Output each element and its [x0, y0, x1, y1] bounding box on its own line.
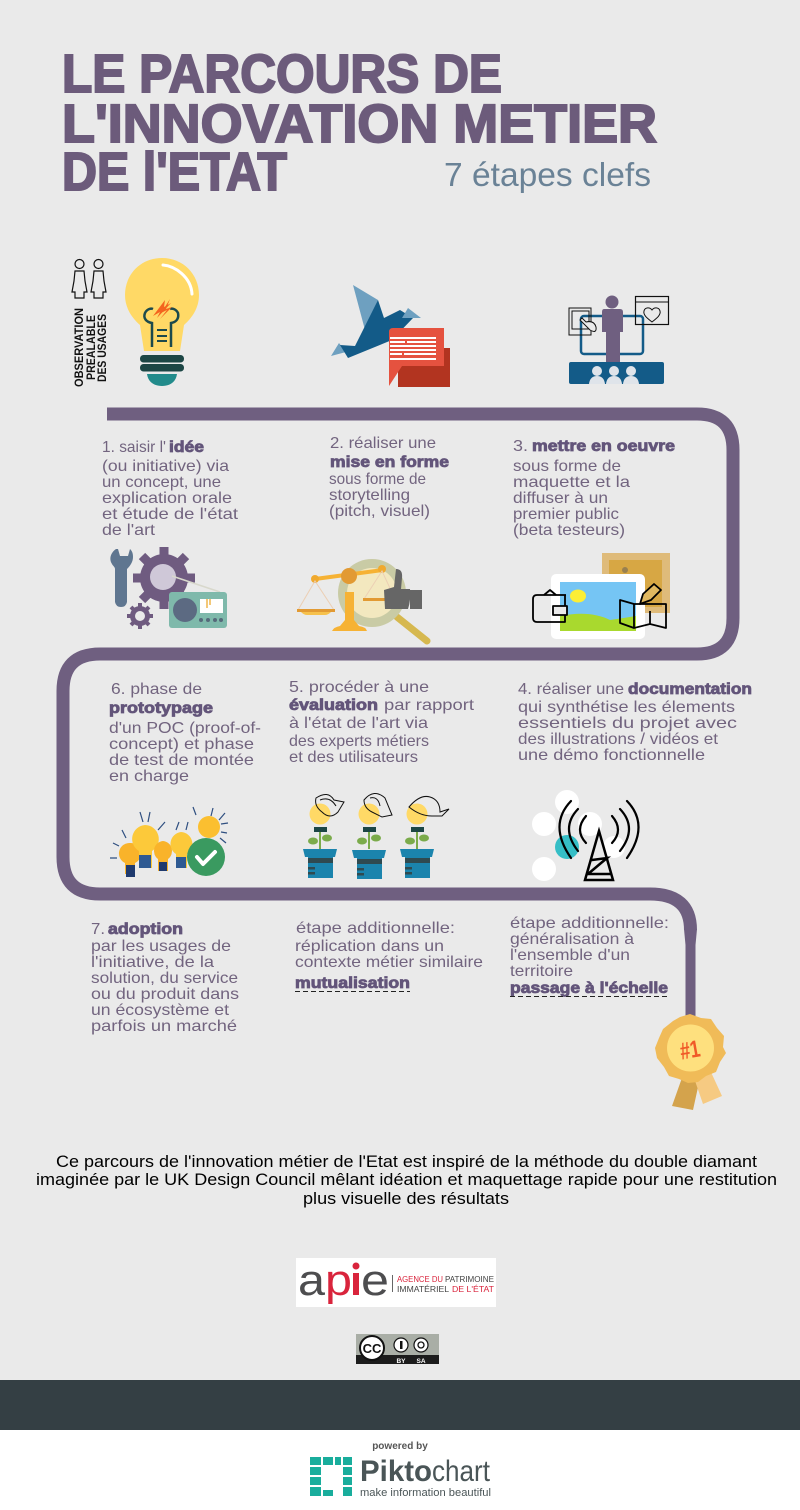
step 1 text: de l'art	[102, 522, 156, 539]
step 2 text: storytelling	[329, 487, 410, 504]
step 7 text: par les usages de	[91, 938, 231, 955]
step 2 text: (pitch, visuel)	[329, 503, 430, 520]
additional step: mutualisation: étape additionnelle:	[296, 920, 455, 937]
powered by Piktochart: chart	[432, 1455, 491, 1488]
step 3 text	[513, 438, 675, 539]
additional step: passage à l'échelle: territoire	[510, 963, 573, 980]
title: LE PARCOURS DE	[62, 44, 502, 104]
label: observation préalable des usages: PREALABLE	[86, 315, 98, 380]
additional step: mutualisation: mutualisation	[295, 975, 410, 992]
step 4 text: documentation	[628, 681, 752, 698]
additional step: passage à l'échelle: l'ensemble d'un	[510, 947, 630, 964]
step 2 text: mise en forme	[330, 454, 449, 471]
powered by Piktochart: powered by	[372, 1441, 428, 1452]
badge: creative commons	[356, 1334, 439, 1365]
step 7 text: ou du produit dans	[91, 986, 239, 1003]
footer band	[0, 1380, 800, 1430]
icon: photo, wallet and map	[533, 553, 670, 639]
step 1 text: explication orale	[102, 490, 232, 507]
step 7 text: parfois un marché	[91, 1018, 237, 1035]
step 3 text: diffuser à un	[513, 490, 608, 507]
step 7 text: adoption	[108, 921, 183, 938]
footer note: plus visuelle des résultats	[303, 1189, 509, 1208]
additional step: passage à l'échelle: étape additionnelle:	[510, 915, 669, 932]
step 1 text: un concept, une	[102, 474, 221, 491]
step 3 text: maquette et la	[513, 474, 630, 491]
step 1 text: (ou initiative) via	[102, 458, 229, 475]
step 6 text: en charge	[109, 768, 189, 785]
icon: three plants with zodiac bulbs	[303, 793, 449, 879]
logo: apie: IMMATÉRIEL	[397, 1284, 449, 1294]
step 6 text: concept) et phase	[109, 736, 254, 753]
step 6 text: prototypage	[109, 700, 213, 717]
step 2 text: 2. réaliser une	[330, 435, 436, 452]
step 5 text	[289, 679, 475, 766]
logo: apie: p	[325, 1256, 352, 1305]
step 7 text: un écosystème et	[91, 1002, 230, 1019]
step 5 text: des experts métiers	[289, 733, 429, 750]
footer note: imaginée par le UK Design Council mêlant idéation et maquettage rapide pour une restitution	[36, 1170, 777, 1189]
step 5 text: 5. procéder à une	[289, 679, 429, 696]
additional step: mutualisation	[295, 920, 483, 992]
powered by Piktochart: Pikto	[360, 1455, 432, 1488]
step 4 text: essentiels du projet avec	[518, 715, 737, 732]
icon: people observing	[72, 260, 106, 298]
logo: apie	[296, 1256, 496, 1307]
footer note	[36, 1152, 777, 1208]
logo: apie: e	[361, 1256, 389, 1305]
logo: apie: PATRIMOINE	[445, 1274, 494, 1284]
step 2 text	[329, 435, 449, 520]
step 2 text: sous forme de	[329, 471, 426, 488]
step 1 text	[102, 439, 239, 539]
step 6 text: de test de montée	[109, 752, 254, 769]
icon: origami bird and speech bubble	[331, 285, 450, 387]
step 5 text: évaluation	[289, 697, 378, 714]
icon: presenter with audience	[569, 296, 668, 384]
logo: apie: a	[298, 1256, 326, 1305]
step 7 text	[91, 921, 239, 1035]
additional step: passage à l'échelle: généralisation à	[510, 931, 634, 948]
additional step: passage à l'échelle	[510, 915, 669, 997]
additional step: mutualisation: contexte métier similaire	[295, 954, 483, 971]
step 3 text: 3.	[513, 438, 528, 455]
step 6 text: 6. phase de	[111, 681, 202, 698]
label: observation préalable des usages	[74, 308, 109, 387]
icon: rosette badge: #1	[678, 1035, 702, 1066]
badge: creative commons: SA	[416, 1358, 426, 1365]
powered by Piktochart	[310, 1441, 491, 1499]
logo: apie: DE L'ÉTAT	[452, 1284, 494, 1294]
icon: tools, gears and radio	[110, 547, 227, 629]
step 1 text: idée	[169, 439, 204, 456]
step 6 text: d'un POC (proof-of-	[109, 720, 261, 737]
step 3 text: (beta testeurs)	[513, 522, 625, 539]
white footer	[0, 1430, 800, 1510]
step 4 text: des illustrations / vidéos et	[518, 731, 719, 748]
icon: scales, magnifier and thumb	[297, 559, 427, 641]
step 1 text: et étude de l'état	[102, 506, 239, 523]
step 6 text	[109, 681, 261, 785]
icon: rosette badge	[655, 1014, 726, 1110]
badge: creative commons: CC	[363, 1341, 382, 1356]
badge: creative commons: BY	[396, 1358, 406, 1365]
step 4 text: 4. réaliser une	[518, 681, 624, 698]
step 3 text: mettre en oeuvre	[532, 438, 675, 455]
title: DE l'ETAT	[62, 142, 287, 202]
icon: many light bulbs with check	[110, 807, 228, 877]
step 7 text: l'initiative, de la	[91, 954, 214, 971]
step 5 text: à l'état de l'art via	[289, 715, 428, 732]
step 3 text: sous forme de	[513, 458, 621, 475]
title	[62, 44, 657, 202]
icon: network and antenna	[532, 790, 638, 881]
step 5 text: par rapport	[384, 697, 475, 714]
logo: apie: AGENCE DU	[397, 1274, 443, 1284]
winding path	[63, 414, 733, 1020]
footer note: Ce parcours de l'innovation métier de l'Etat est inspiré de la méthode du double diamant	[56, 1152, 757, 1171]
step 7 text: 7.	[91, 921, 105, 938]
step 4 text: une démo fonctionnelle	[518, 747, 705, 764]
title: L'INNOVATION METIER	[62, 94, 657, 154]
step 7 text: solution, du service	[91, 970, 238, 987]
subtitle: 7 étapes clefs	[444, 156, 651, 193]
step 4 text: qui synthétise les élements	[518, 699, 735, 716]
step 1 text: 1. saisir l'	[102, 439, 166, 456]
powered by Piktochart: make information beautiful	[360, 1487, 491, 1499]
step 4 text	[518, 681, 752, 764]
additional step: passage à l'échelle: passage à l'échelle	[510, 980, 668, 997]
step 5 text: et des utilisateurs	[289, 749, 418, 766]
icon: light bulb	[125, 258, 199, 386]
additional step: mutualisation: réplication dans un	[295, 938, 444, 955]
label: observation préalable des usages: OBSERVATION	[74, 308, 86, 387]
step 3 text: premier public	[513, 506, 619, 523]
label: observation préalable des usages: DES USAGES	[97, 314, 109, 382]
